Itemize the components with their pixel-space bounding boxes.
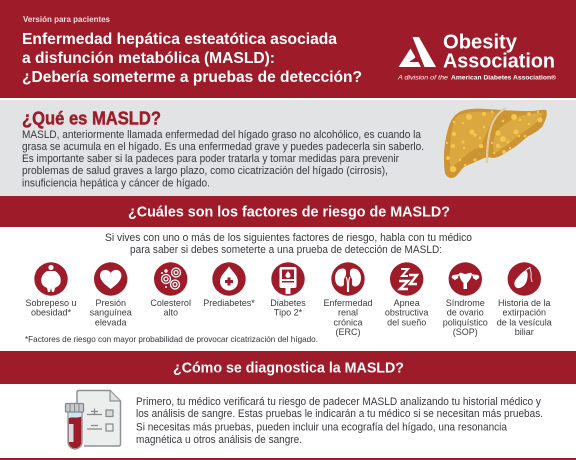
- risk factor: overweight: obesidad*: [31, 308, 72, 318]
- risk factor: sleep apnea: [385, 262, 428, 328]
- risk factor: prediabetes: [203, 262, 255, 308]
- risk factor: high cholesterol: [150, 262, 191, 318]
- text block: risk factor intro: [105, 232, 472, 256]
- risk factor: chronic kidney disease: [323, 262, 373, 337]
- label: patient version: Versión para pacientes: [23, 15, 111, 24]
- risk factor: polycystic ovary syndrome: (SOP): [453, 327, 478, 337]
- heading band: risk factors: [0, 196, 576, 227]
- panel: header: [0, 0, 576, 98]
- text block: MASLD description: problemas de salud graves a largo plazo, como cicatrización del hígado (cirrosis),: [22, 165, 388, 177]
- risk factor: gallbladder removal: Historia de la: [498, 298, 551, 308]
- risk factor: sleep apnea: del sueño: [387, 318, 426, 328]
- text block: MASLD description: Es importante saber si la padeces para poder tratarla y tomar medidas para prevenir: [22, 153, 399, 165]
- risk factor: chronic kidney disease: renal: [338, 308, 358, 318]
- risk factor: gallbladder removal: extirpación: [503, 308, 546, 318]
- risk factor: sleep apnea: Apnea: [394, 298, 420, 308]
- logo: Obesity Association: [397, 32, 557, 82]
- risk factor: chronic kidney disease: Enfermedad: [323, 298, 373, 308]
- logo: Obesity Association: Association: [443, 50, 555, 72]
- icon: medical form and blood tube: [66, 390, 120, 449]
- heading: what is MASLD: ¿Qué es MASLD?: [22, 108, 161, 128]
- risk factor: gallbladder removal: biliar: [515, 327, 534, 337]
- risk factor: high blood pressure: [90, 262, 132, 328]
- risk factor: prediabetes: Prediabetes*: [203, 298, 255, 308]
- risk factor: high blood pressure: elevada: [95, 318, 126, 328]
- footnote: *Factores de riesgo con mayor probabilidad de provocar cicatrización del hígado.: [25, 334, 318, 344]
- risk factor: sleep apnea: obstructiva: [385, 308, 428, 318]
- risk factor: high cholesterol: alto: [163, 308, 178, 318]
- risk factor: polycystic ovary syndrome: de ovario: [447, 308, 484, 318]
- risk factor: high blood pressure: Presión: [95, 298, 126, 308]
- footer band: [0, 458, 576, 460]
- heading band: diagnosis: ¿Cómo se diagnostica la MASLD?: [173, 360, 404, 376]
- text block: diagnosis explanation: los análisis de sangre. Estas pruebas le indicarán a tu médico si se necesitan más pruebas.: [136, 408, 543, 420]
- risk factor: type 2 diabetes: Tipo 2*: [274, 308, 303, 318]
- text block: MASLD description: insuficiencia hepática y cáncer de hígado.: [22, 178, 210, 190]
- risk factor: type 2 diabetes: [270, 262, 306, 318]
- risk factor: chronic kidney disease: crónica: [333, 318, 363, 328]
- risk factor: high cholesterol: Colesterol: [150, 298, 191, 308]
- logo: Obesity Association: A division of the: [397, 76, 449, 82]
- text block: MASLD description: [22, 129, 424, 190]
- risk factor: overweight: [25, 262, 77, 318]
- risk factor: overweight: Sobrepeso u: [25, 298, 77, 308]
- panel: what is MASLD: [0, 100, 576, 196]
- text block: diagnosis explanation: Primero, tu médico verificará tu riesgo de padecer MASLD analizando tu historial médico y: [136, 396, 542, 408]
- text block: MASLD description: grasa se acumula en el hígado. Es una enfermedad grave y puedes padecerla sin saberlo.: [22, 141, 424, 153]
- title: Enfermedad hepática esteatótica asociada: [22, 31, 337, 48]
- text block: diagnosis explanation: magnética u otros análisis de sangre.: [136, 434, 302, 446]
- title: [22, 31, 362, 86]
- text block: risk factor intro: para saber si debes someterte a una prueba de detección de MASLD:: [130, 244, 442, 256]
- risk factor: type 2 diabetes: Diabetes: [270, 298, 306, 308]
- text block: MASLD description: MASLD, anteriormente llamada enfermedad del hígado graso no alcohólico, es cuando la: [22, 129, 421, 141]
- text block: diagnosis explanation: Si necesitas más pruebas, pueden incluir una ecografía del hígado, una resonancia: [136, 422, 507, 434]
- heading band: diagnosis: [0, 351, 576, 384]
- risk factor: gallbladder removal: de la vesícula: [497, 318, 552, 328]
- text block: diagnosis explanation: [136, 396, 543, 446]
- title: a disfunción metabólica (MASLD):: [22, 50, 275, 67]
- logo: Obesity Association: American Diabetes Association®: [451, 74, 557, 82]
- title: ¿Debería someterme a pruebas de detección?: [22, 69, 362, 86]
- risk factor: chronic kidney disease: (ERC): [336, 327, 360, 337]
- logo: Obesity Association: Obesity: [443, 32, 518, 54]
- risk factor: polycystic ovary syndrome: [443, 262, 488, 337]
- risk factor: high blood pressure: sanguínea: [90, 308, 132, 318]
- risk factor: gallbladder removal: [497, 262, 552, 337]
- text block: risk factor intro: Si vives con uno o más de los siguientes factores de riesgo, habla con tu médico: [105, 232, 472, 244]
- risk factor: polycystic ovary syndrome: poliquístico: [443, 318, 488, 328]
- icon: fatty liver: [444, 108, 547, 178]
- risk factor: polycystic ovary syndrome: Síndrome: [446, 298, 485, 308]
- heading band: risk factors: ¿Cuáles son los factores de riesgo de MASLD?: [128, 204, 450, 220]
